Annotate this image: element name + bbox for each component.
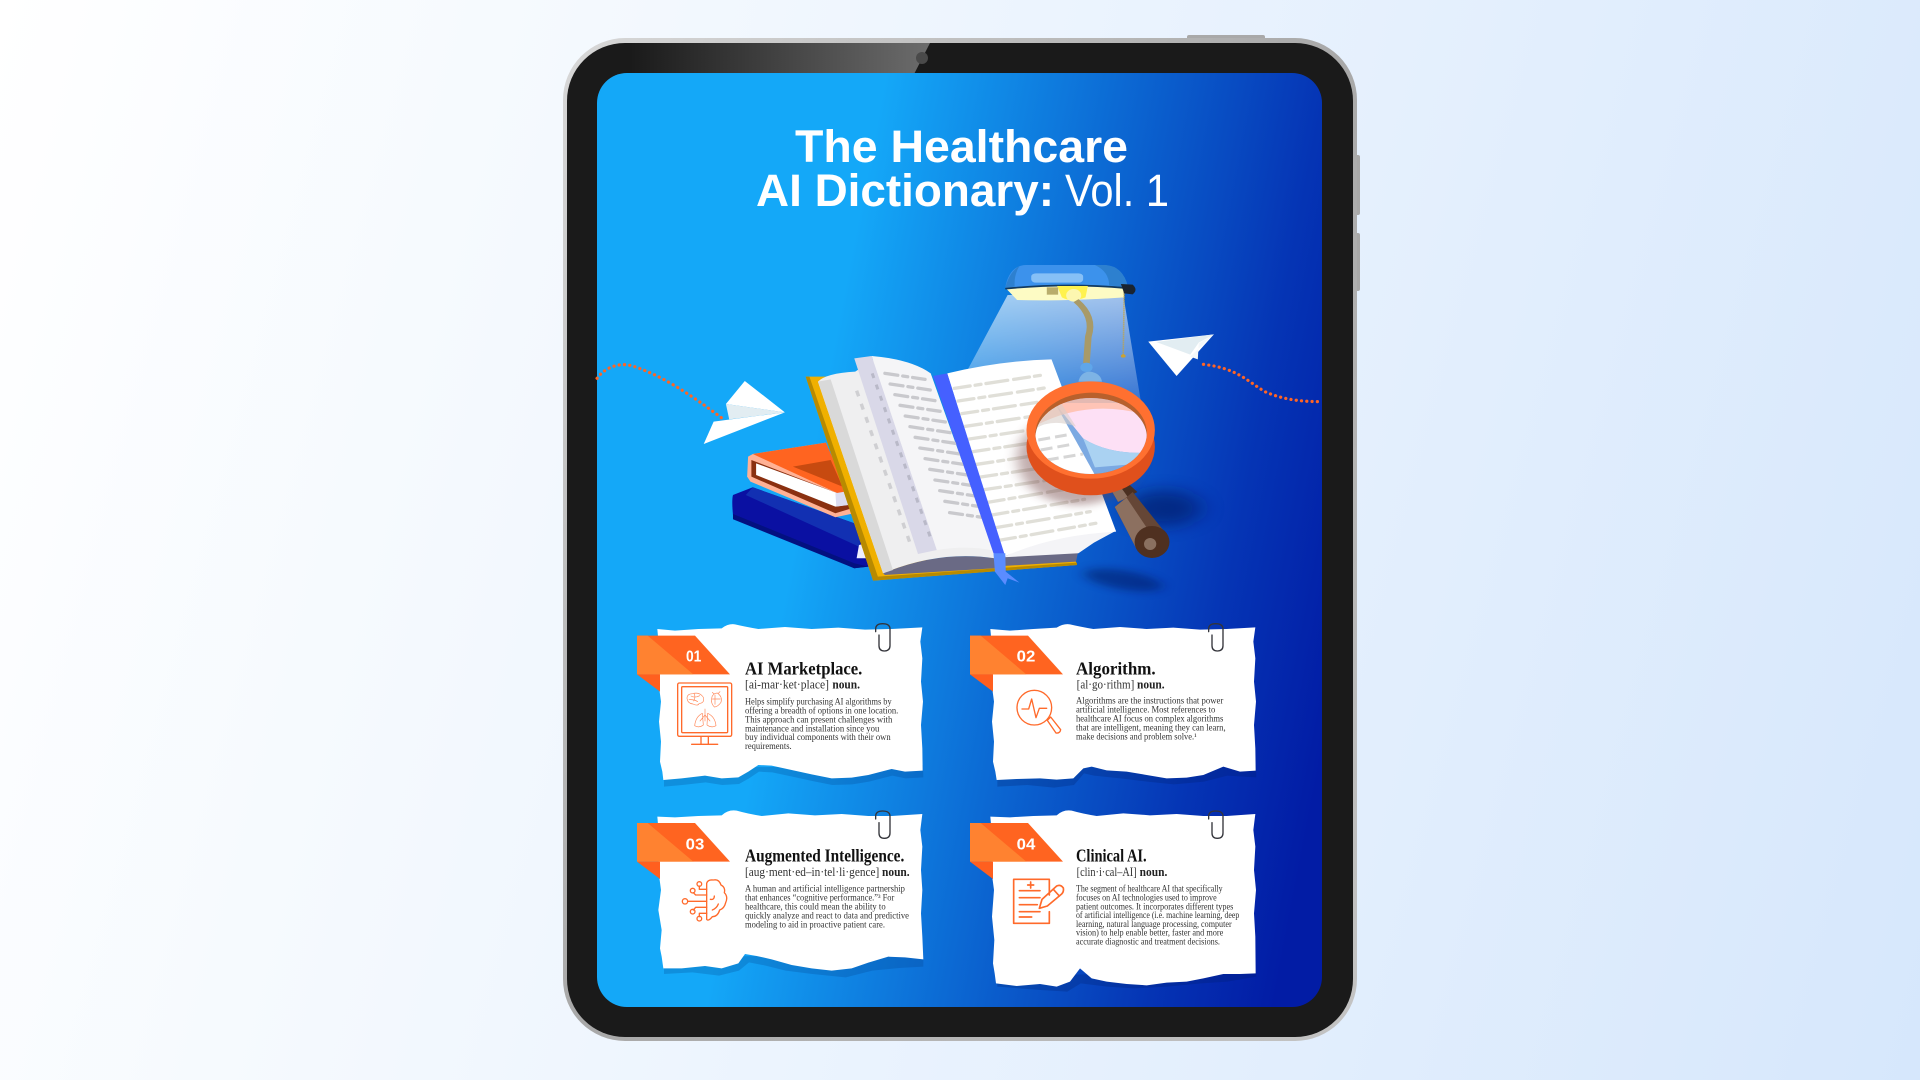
card 04: Clinical AI (970, 810, 1256, 992)
top button (1187, 35, 1265, 41)
definition: of artificial intelligence (i.e. machine learning, deep (1076, 910, 1240, 920)
definition: A human and artificial intelligence partnership (745, 884, 905, 894)
orange book (747, 443, 854, 517)
right page (947, 359, 1116, 557)
ribbon (637, 823, 730, 879)
definition: Helps simplify purchasing AI algorithms by (745, 696, 892, 706)
paperclip (1209, 811, 1223, 838)
bezel glare (630, 43, 930, 73)
definition: accurate diagnostic and treatment decisions. (1076, 937, 1220, 947)
magnifying glass (1017, 381, 1169, 558)
icon: monitor with organs (678, 683, 732, 744)
definition: maintenance and installation since you (745, 723, 880, 733)
title (756, 121, 1169, 216)
lamp light cone (968, 295, 1141, 403)
ring back (1027, 398, 1155, 495)
ribbon: 02 (1017, 649, 1035, 666)
book cover (806, 377, 1077, 581)
pronunciation: noun. (882, 865, 910, 879)
definition: modeling to aid in proactive patient care. (745, 919, 885, 929)
paper shadow (664, 765, 923, 787)
left pages (854, 356, 937, 554)
ribbon: 04 (1017, 836, 1035, 853)
definition: healthcare, this could mean the ability to (745, 902, 886, 912)
definition: quickly analyze and react to data and predictive (745, 910, 909, 920)
definition (1076, 696, 1226, 742)
side button lower (1354, 233, 1360, 291)
definition (745, 696, 898, 751)
torn paper (657, 624, 923, 780)
paper plane right (1148, 334, 1214, 376)
right page text (954, 375, 1096, 540)
icon: clipboard and pen (1014, 879, 1063, 923)
card 02: Algorithm (970, 624, 1256, 788)
paper shadow (997, 970, 1256, 992)
term: Clinical AI. (1076, 845, 1147, 865)
torn paper (990, 810, 1256, 987)
definition (745, 884, 909, 929)
definition: buy individual components with their own (745, 732, 891, 742)
tablet device (563, 35, 1360, 1041)
side button upper (1354, 155, 1360, 215)
left page text (885, 373, 986, 518)
extra right pages (1003, 531, 1116, 557)
shadows (1081, 490, 1201, 596)
dotted path left (597, 365, 722, 418)
illustration: open book with lamp and magnifier (597, 265, 1321, 596)
handle (1110, 479, 1137, 502)
pronunciation: [aug·ment·ed–in·tel·li·gence] (745, 865, 879, 879)
definition: This approach can present challenges with (745, 714, 893, 724)
stacked books (732, 443, 868, 568)
lamp (968, 265, 1141, 403)
paperclip (876, 811, 890, 838)
pronunciation: [al·go·rithm] (1077, 677, 1134, 691)
pronunciation: noun. (1137, 677, 1165, 691)
paper plane left (704, 381, 785, 444)
blue spine band (933, 373, 1005, 557)
definition: focuses on AI technologies used to improve (1076, 892, 1217, 902)
ring front (1027, 381, 1155, 479)
definition: learning, natural language processing, computer (1076, 919, 1232, 929)
paperclip (876, 624, 890, 651)
title: The Healthcare (795, 121, 1128, 172)
ribbon: 03 (686, 836, 704, 853)
title: AI Dictionary: (756, 165, 1054, 216)
term: Augmented Intelligence. (745, 845, 904, 865)
paperclip (1209, 624, 1223, 651)
right underside pages (1003, 550, 1078, 566)
definition: healthcare AI focus on complex algorithms (1076, 714, 1224, 724)
definition: vision) to help enable better, faster and more (1076, 928, 1223, 938)
left underside pages (883, 556, 995, 575)
tablet frame (563, 38, 1357, 1041)
ribbon (970, 823, 1063, 879)
definition: The segment of healthcare AI that specifically (1076, 883, 1223, 893)
camera (916, 52, 928, 64)
ribbon (970, 636, 1063, 692)
definition: requirements. (745, 741, 792, 751)
ring shadow on page (1017, 412, 1140, 505)
pronunciation: [ai-mar·ket·place] (745, 677, 829, 691)
pronunciation: [clin·i·cal–AI] (1077, 865, 1137, 879)
icon: magnifier with pulse (1017, 690, 1061, 733)
icon: circuit brain (682, 880, 727, 921)
blue book (732, 487, 868, 568)
title: Vol. 1 (1065, 165, 1169, 216)
definition: that are intelligent, meaning they can learn, (1076, 723, 1226, 733)
definition: Algorithms are the instructions that power (1076, 696, 1223, 706)
definition: patient outcomes. It incorporates different types (1076, 901, 1234, 911)
pronunciation: noun. (1140, 865, 1167, 879)
torn paper (657, 810, 923, 971)
torn paper (990, 624, 1256, 780)
paper shadow (664, 954, 923, 977)
definition: offering a breadth of options in one location. (745, 705, 898, 715)
pronunciation: noun. (832, 677, 860, 691)
dotted path right (1203, 364, 1321, 402)
paper shadow (997, 765, 1256, 788)
definition: that enhances “cognitive performance.”³ For (745, 893, 894, 903)
ribbon: 01 (686, 649, 701, 666)
infographic (563, 35, 1360, 1041)
ribbon (637, 636, 730, 692)
term: AI Marketplace. (745, 658, 862, 678)
card 03: Augmented Intelligence (637, 810, 923, 977)
open book (806, 356, 1116, 585)
lens (1036, 392, 1147, 474)
definition: artificial intelligence. Most references to (1076, 705, 1216, 715)
definition: make decisions and problem solve.¹ (1076, 732, 1197, 742)
tablet bezel (567, 43, 1353, 1037)
gutter marks (857, 391, 912, 548)
term: Algorithm. (1076, 658, 1156, 678)
left page stack (818, 360, 996, 573)
screen (597, 73, 1322, 1007)
card 01: AI Marketplace (637, 624, 923, 787)
definition (1076, 883, 1240, 947)
ribbon bookmark (993, 553, 1019, 585)
